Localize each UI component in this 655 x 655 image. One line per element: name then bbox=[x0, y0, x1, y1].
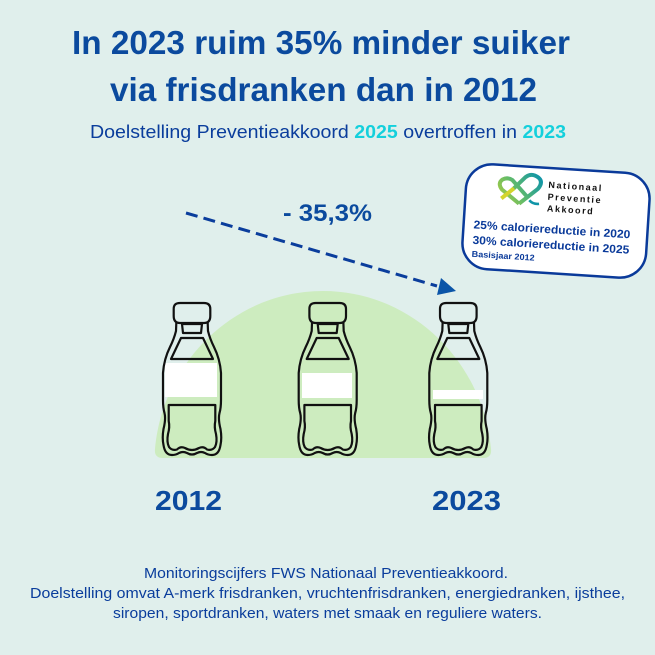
footer note: Monitoringscijfers FWS Nationaal Preventieakkoord. bbox=[144, 566, 508, 582]
logo wordmark: Nationaal bbox=[548, 180, 603, 193]
year label 2023: 2023 bbox=[432, 485, 501, 516]
callout text: 25% caloriereductie in 2020 bbox=[473, 219, 631, 241]
reduction percentage: - 35,3% bbox=[283, 200, 372, 227]
year label 2012: 2012 bbox=[155, 485, 222, 516]
callout text: Basisjaar 2012 bbox=[471, 249, 535, 263]
callout: Nationaal Preventie Akkoord bbox=[461, 163, 651, 279]
green dome background bbox=[155, 291, 491, 458]
icon: heart logo bbox=[499, 173, 541, 205]
title bbox=[72, 24, 570, 108]
bottle 2012 bbox=[163, 303, 221, 455]
callout text: 30% caloriereductie in 2025 bbox=[472, 235, 630, 257]
bottle middle bbox=[298, 303, 357, 455]
callout text bbox=[471, 219, 631, 269]
title: In 2023 ruim 35% minder suiker bbox=[72, 24, 570, 61]
subtitle: Doelstelling Preventieakkoord 2025 overtroffen in 2023 bbox=[90, 122, 566, 142]
footer note: siropen, sportdranken, waters met smaak en reguliere waters. bbox=[113, 606, 542, 622]
bottle 2023 bbox=[429, 303, 488, 455]
logo wordmark: Akkoord bbox=[547, 203, 595, 216]
footer note bbox=[30, 566, 625, 622]
title: via frisdranken dan in 2012 bbox=[110, 71, 537, 108]
dashed arrow bbox=[186, 213, 456, 295]
logo wordmark bbox=[547, 180, 603, 217]
footer note: Doelstelling omvat A-merk frisdranken, vruchtenfrisdranken, energiedranken, ijsthee, bbox=[30, 586, 625, 602]
logo wordmark: Preventie bbox=[547, 192, 602, 205]
